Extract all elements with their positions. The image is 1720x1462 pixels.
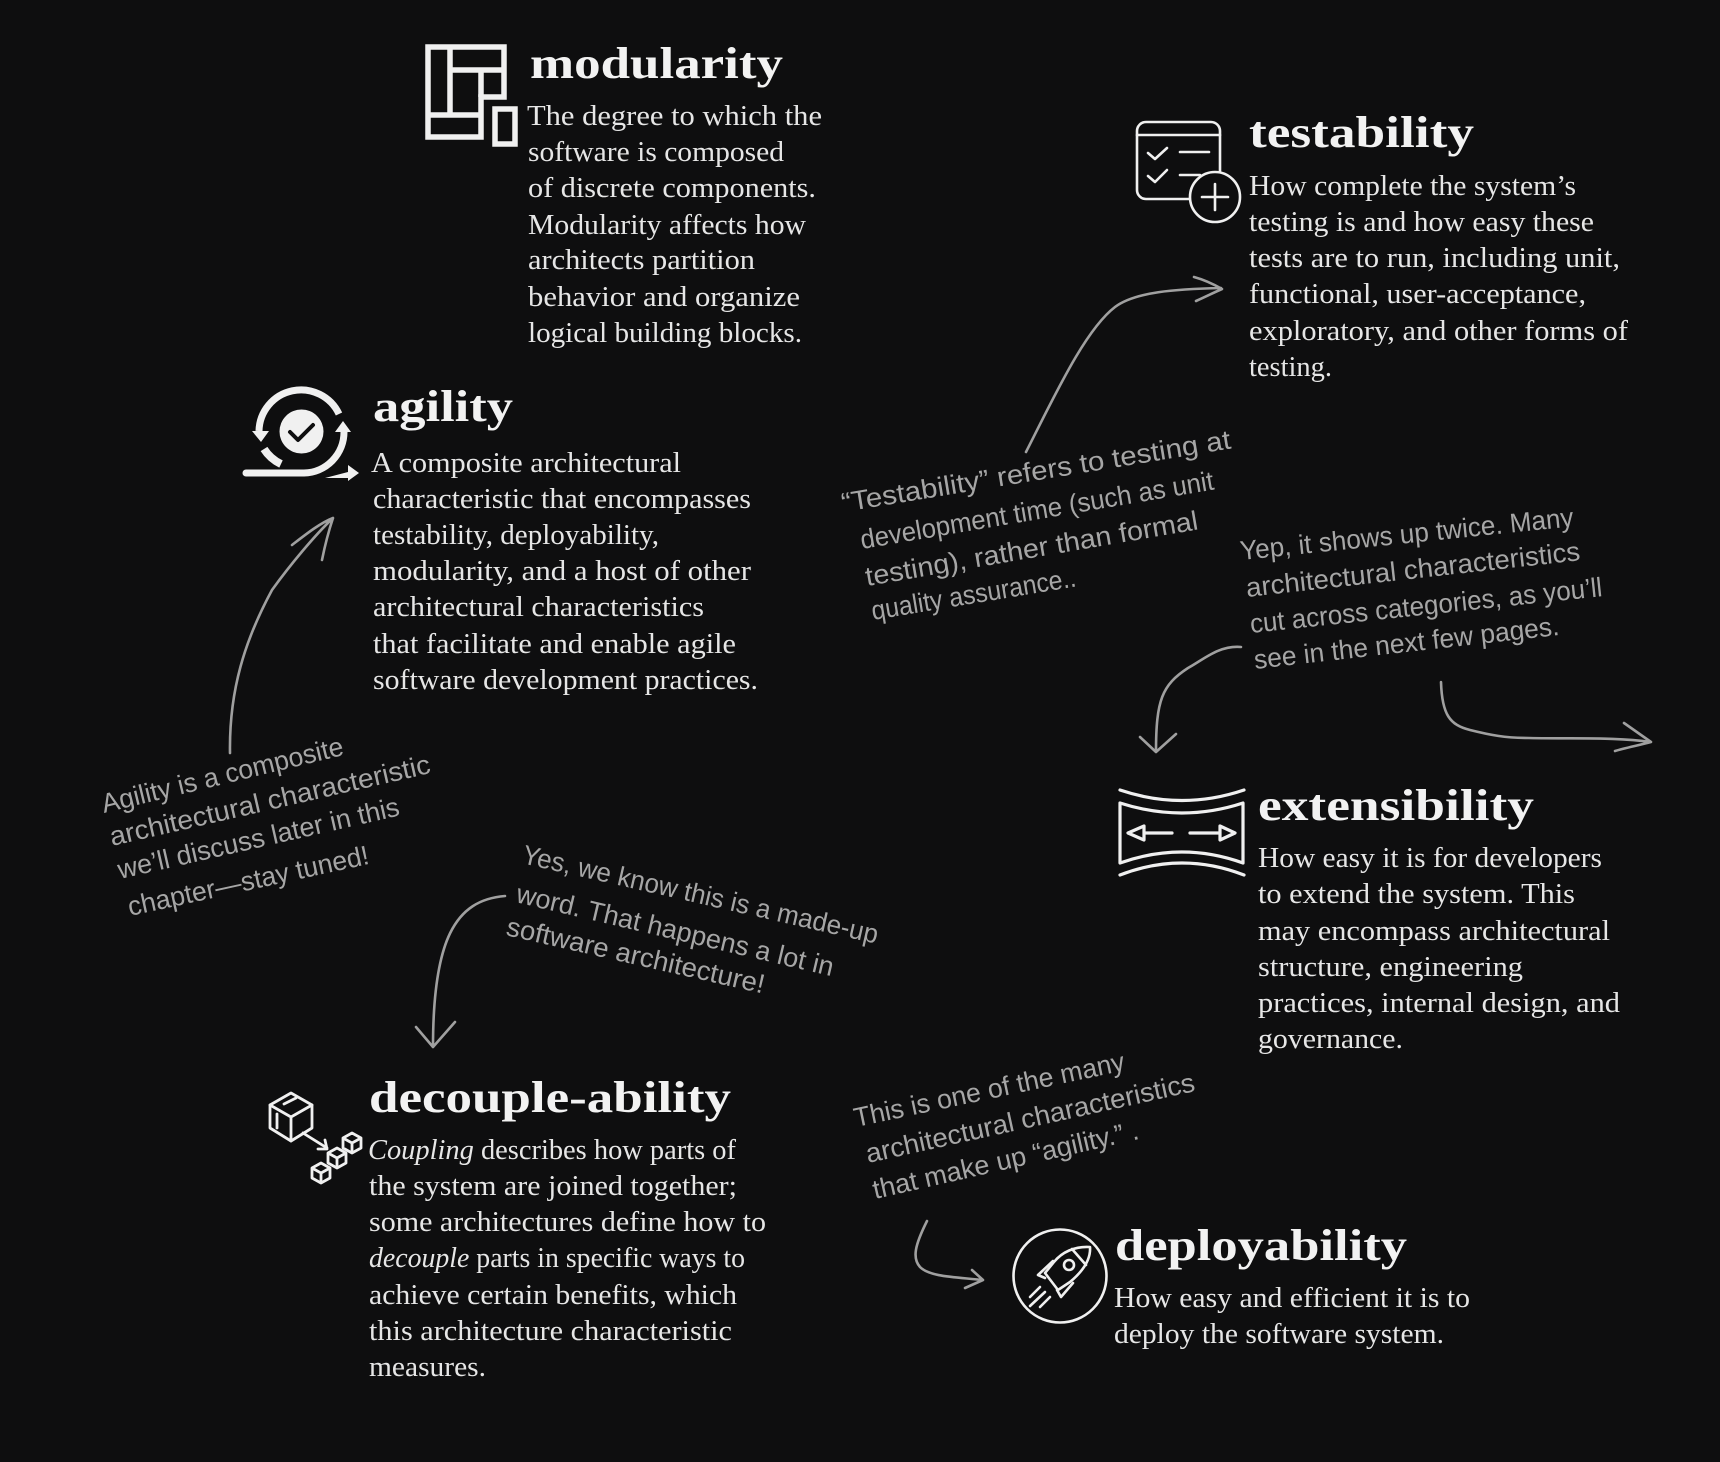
- text: agility description: [371, 447, 758, 696]
- text: decouple-ability description: some architectures define how to: [369, 1206, 766, 1238]
- text: extensibility description: to extend the system. This: [1258, 878, 1575, 910]
- text: modularity description: architects partition: [528, 244, 756, 276]
- arrow: note to agility: [230, 518, 333, 753]
- note: made-up word: [504, 840, 881, 999]
- panel: modularity: [428, 39, 822, 349]
- text: agility description: modularity, and a host of other: [373, 555, 751, 587]
- icon: cube splitting into small cubes: [270, 1093, 361, 1183]
- text: agility description: architectural characteristics: [373, 591, 704, 623]
- icon: rocket in circle: [1014, 1230, 1106, 1322]
- text: extensibility description: practices, internal design, and: [1258, 987, 1621, 1019]
- note: part of agility: This is one of the many: [851, 1047, 1128, 1133]
- text: testability description: How complete the system’s: [1249, 170, 1576, 202]
- arrow: note to extensibility: [1140, 647, 1241, 752]
- text: agility description: A composite architectural: [371, 447, 681, 479]
- text: deployability description: deploy the software system.: [1114, 1318, 1444, 1350]
- text: decouple-ability description: Coupling describes how parts of: [368, 1134, 736, 1166]
- heading: testability: testability: [1249, 108, 1474, 157]
- icon: stretching frame: [1120, 790, 1244, 875]
- arrow: note to deployability: [916, 1221, 983, 1288]
- note: shows up twice: Yep, it shows up twice. Many: [1239, 502, 1575, 566]
- text: agility description: testability, deployability,: [373, 519, 659, 551]
- panel: agility: [246, 382, 758, 696]
- note: agility is composite: architectural characteristic: [107, 749, 433, 852]
- note: testability definition: quality assurance..: [869, 563, 1078, 626]
- arrow: note to testability: [1026, 277, 1222, 452]
- text: decouple-ability description: the system are joined together;: [369, 1170, 737, 1202]
- text: modularity description: Modularity affects how: [528, 209, 806, 241]
- heading: agility: agility: [373, 382, 513, 431]
- text: extensibility description: How easy it is for developers: [1258, 842, 1602, 874]
- heading: modularity: modularity: [530, 39, 783, 88]
- text: extensibility description: [1258, 842, 1621, 1055]
- text: testability description: testing.: [1249, 351, 1332, 383]
- note: testability definition: “Testability” refers to testing at: [839, 425, 1233, 518]
- icon: checklist with plus: [1137, 122, 1240, 222]
- text: extensibility description: may encompass architectural: [1258, 915, 1610, 947]
- note: part of agility: [851, 1047, 1197, 1205]
- note: testability definition: development time (such as unit: [858, 466, 1216, 555]
- text: extensibility description: governance.: [1258, 1023, 1403, 1055]
- text: decouple-ability description: achieve certain benefits, which: [369, 1279, 738, 1311]
- icon: agile loop with check: [246, 390, 359, 481]
- panel: extensibility: [1120, 781, 1621, 1055]
- text: agility description: characteristic that encompasses: [373, 483, 751, 515]
- note: shows up twice: architectural characteristics: [1244, 536, 1582, 603]
- arrow: note to next page: [1441, 682, 1651, 751]
- panel: deployability: [1014, 1221, 1470, 1350]
- text: decouple-ability description: measures.: [369, 1351, 486, 1383]
- text: modularity description: of discrete components.: [528, 172, 816, 204]
- note: part of agility: architectural characteristics: [863, 1067, 1197, 1169]
- text: extensibility description: structure, engineering: [1258, 951, 1523, 983]
- note: agility is composite: Agility is a composite: [98, 731, 346, 819]
- note: part of agility: that make up “agility.” .: [870, 1115, 1142, 1205]
- note: agility is composite: we’ll discuss later in this: [114, 792, 402, 885]
- text: modularity description: software is composed: [528, 136, 784, 168]
- text: deployability description: [1114, 1282, 1470, 1350]
- text: decouple-ability description: [368, 1134, 766, 1383]
- note: shows up twice: [1239, 502, 1604, 675]
- text: modularity description: behavior and organize: [528, 281, 800, 313]
- note: testability definition: [839, 425, 1233, 626]
- text: agility description: software development practices.: [373, 664, 758, 696]
- heading: extensibility: extensibility: [1258, 781, 1534, 830]
- heading: decouple-ability: decouple-ability: [369, 1073, 731, 1122]
- text: modularity description: logical building blocks.: [528, 317, 802, 349]
- heading: deployability: deployability: [1115, 1221, 1407, 1270]
- text: modularity description: The degree to which the: [527, 100, 822, 132]
- text: testability description: testing is and how easy these: [1249, 206, 1594, 238]
- note: made-up word: word. That happens a lot in: [513, 878, 837, 982]
- text: testability description: exploratory, and other forms of: [1249, 315, 1628, 347]
- note: agility is composite: [98, 731, 433, 922]
- text: testability description: functional, user-acceptance,: [1249, 278, 1586, 310]
- icon: modular blocks: [428, 47, 515, 144]
- text: decouple-ability description: decouple parts in specific ways to: [369, 1242, 745, 1274]
- note: testability definition: testing), rather than formal: [863, 506, 1200, 592]
- panel: decouple-ability: [270, 1073, 766, 1383]
- text: testability description: [1249, 170, 1628, 383]
- text: modularity description: [527, 100, 822, 349]
- note: agility is composite: chapter—stay tuned!: [125, 840, 372, 922]
- note: shows up twice: see in the next few pages.: [1252, 611, 1561, 675]
- arrow: note to decouple-ability: [416, 896, 505, 1047]
- note: made-up word: Yes, we know this is a made-up: [520, 840, 881, 949]
- text: deployability description: How easy and efficient it is to: [1114, 1282, 1470, 1314]
- text: agility description: that facilitate and enable agile: [373, 628, 736, 660]
- text: testability description: tests are to run, including unit,: [1249, 242, 1620, 274]
- note: made-up word: software architecture!: [504, 912, 768, 999]
- panel: testability: [1137, 108, 1628, 383]
- note: shows up twice: cut across categories, as you’ll: [1248, 572, 1604, 639]
- text: decouple-ability description: this architecture characteristic: [369, 1315, 732, 1347]
